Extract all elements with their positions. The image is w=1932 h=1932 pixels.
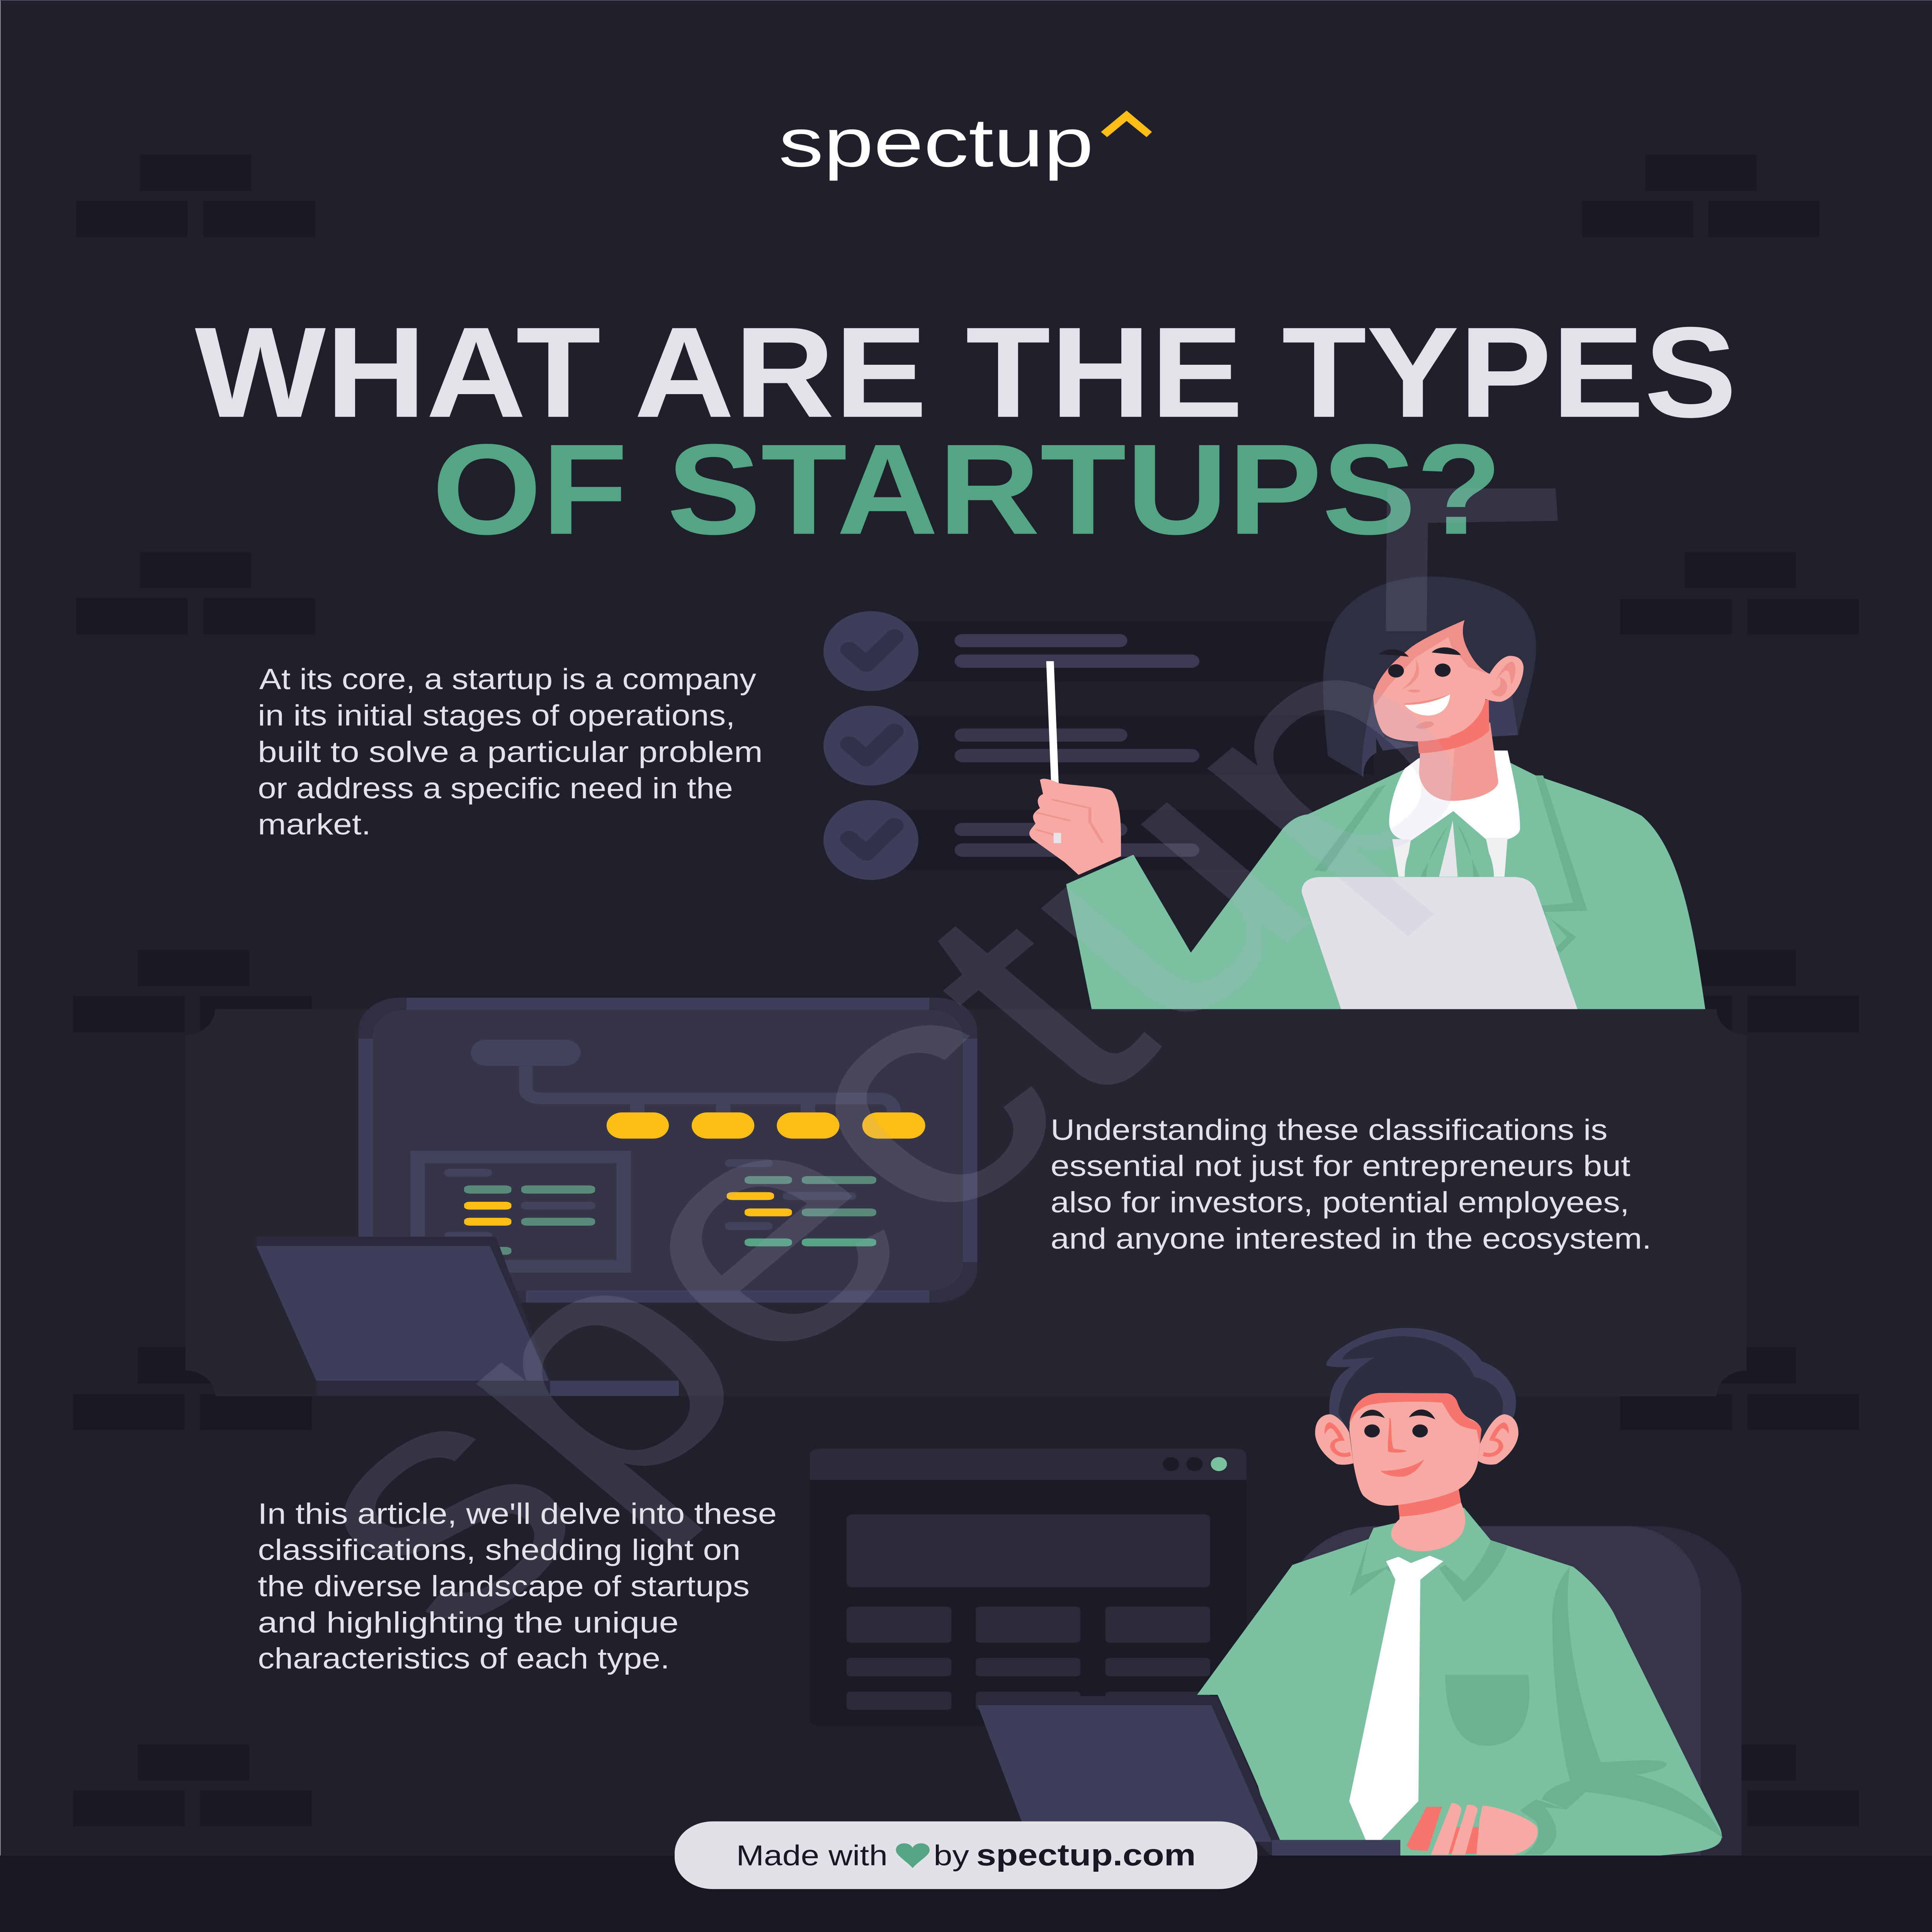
watermark logo: spectup xyxy=(204,559,1557,1697)
flow connector xyxy=(471,1039,894,1114)
logo: spectup xyxy=(779,104,1094,181)
neck xyxy=(1419,723,1498,801)
footer pill: by xyxy=(934,1840,969,1872)
middle panel xyxy=(185,1009,1747,1396)
shirt folds and collar xyxy=(1350,1539,1723,1855)
paragraph: what is a startup: market. xyxy=(258,808,371,841)
paragraph: article overview: and highlighting the unique xyxy=(258,1606,679,1639)
shirt collar xyxy=(1389,750,1520,841)
man at desk xyxy=(978,1328,1742,1856)
laptop on desk xyxy=(978,1696,1280,1856)
clipboard xyxy=(1302,877,1577,1009)
paragraph: why classifications matter: and anyone interested in the ecosystem. xyxy=(1051,1222,1651,1255)
bottom band xyxy=(0,1855,1932,1932)
title xyxy=(195,300,1737,561)
paragraph: why classifications matter: also for investors, potential employees, xyxy=(1051,1186,1629,1219)
paragraph: article overview: the diverse landscape of startups xyxy=(258,1570,750,1602)
face xyxy=(1349,1393,1481,1506)
paragraph: why classifications matter: essential not just for entrepreneurs but xyxy=(1051,1150,1630,1182)
chair xyxy=(1626,1526,1742,1856)
yellow pills xyxy=(607,1112,925,1139)
desk hand xyxy=(1406,1803,1537,1855)
browser window illustration xyxy=(810,1449,1246,1726)
footer pill: Made with xyxy=(736,1840,888,1872)
hand xyxy=(1029,779,1121,875)
checklist illustration xyxy=(823,611,1374,880)
woman presenter xyxy=(1029,577,1705,1009)
ears xyxy=(1315,1414,1354,1465)
paragraph: what is a startup: At its core, a startup is a company xyxy=(259,663,756,696)
green shirt xyxy=(1197,1508,1722,1856)
tie xyxy=(1349,1556,1443,1851)
title: WHAT ARE THE TYPES xyxy=(195,300,1737,444)
footer pill: spectup.com xyxy=(976,1838,1196,1872)
laptop in middle panel xyxy=(256,1237,679,1396)
footer pill xyxy=(675,1821,1257,1889)
paragraph: what is a startup xyxy=(258,663,763,841)
paragraph: article overview: classifications, shedding light on xyxy=(258,1534,741,1566)
paragraph: what is a startup: or address a specific need in the xyxy=(258,772,733,804)
paragraph: why classifications matter: Understanding these classifications is xyxy=(1051,1114,1607,1146)
paragraph: what is a startup: built to solve a particular problem xyxy=(258,736,763,768)
paragraph: article overview: In this article, we'll delve into these xyxy=(258,1497,777,1530)
man head xyxy=(1315,1328,1519,1551)
paragraph: why classifications matter xyxy=(1051,1114,1651,1255)
dashboard text bars xyxy=(410,1151,876,1272)
pointer stick xyxy=(1046,661,1061,843)
title: OF STARTUPS? xyxy=(432,417,1502,561)
icon: heart xyxy=(896,1844,930,1868)
paragraph: what is a startup: in its initial stages of operations, xyxy=(258,699,735,732)
watermark logo xyxy=(204,396,1751,1697)
paragraph: article overview xyxy=(258,1497,777,1675)
neck bow xyxy=(1405,811,1494,877)
woman head xyxy=(1373,620,1524,753)
paragraph: article overview: characteristics of each type. xyxy=(258,1642,670,1675)
suit jacket xyxy=(1066,761,1705,1009)
dashboard monitor xyxy=(359,998,977,1303)
